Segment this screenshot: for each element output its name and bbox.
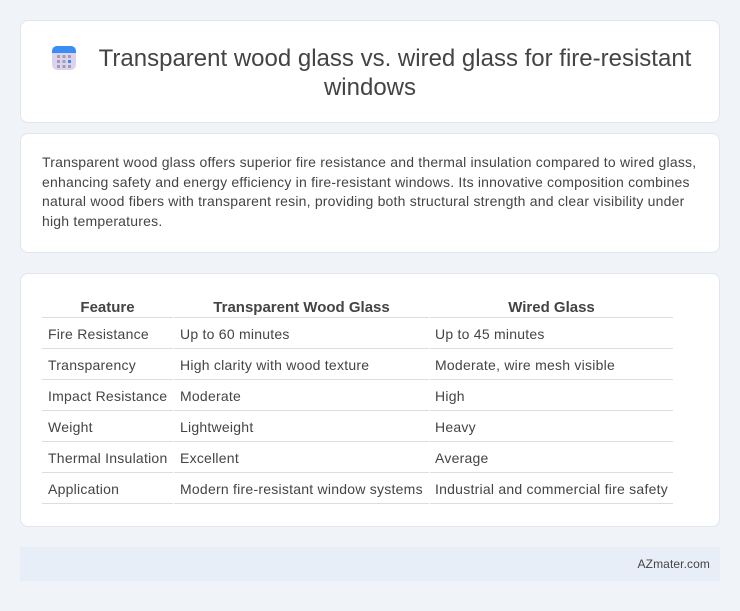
summary text: natural wood fibers with transparent resin, providing both structural strength and clear visibility under: [42, 193, 685, 209]
comparison table content: Transparency: [48, 357, 136, 373]
footer bar: [20, 547, 720, 581]
footer credit: AZmater.com: [638, 557, 710, 571]
panel: summary: [20, 133, 720, 253]
comparison table content: Up to 60 minutes: [180, 326, 290, 342]
comparison table content: High: [435, 388, 465, 404]
comparison table content: Industrial and commercial fire safety: [435, 481, 668, 497]
comparison table content: Excellent: [180, 450, 239, 466]
comparison table content: Wired Glass: [508, 299, 595, 316]
comparison table content: Heavy: [435, 419, 476, 435]
comparison table content: Moderate: [180, 388, 241, 404]
summary text: high temperatures.: [42, 213, 162, 229]
comparison table content: Impact Resistance: [48, 388, 167, 404]
comparison table content: Up to 45 minutes: [435, 326, 545, 342]
comparison table content: Thermal Insulation: [48, 450, 168, 466]
icon: calendar: [52, 46, 76, 70]
comparison table content: Fire Resistance: [48, 326, 149, 342]
comparison table content: Lightweight: [180, 419, 253, 435]
comparison table content: [42, 299, 673, 504]
comparison table content: Feature: [80, 299, 135, 316]
comparison table content: Weight: [48, 419, 93, 435]
title: [99, 45, 692, 101]
summary text: Transparent wood glass offers superior fire resistance and thermal insulation compared to wired glass,: [42, 154, 696, 170]
comparison table content: Application: [48, 481, 119, 497]
title: Transparent wood glass vs. wired glass for fire-resistant: [99, 45, 691, 72]
summary text: enhancing safety and energy efficiency in fire-resistant windows. Its innovative composition combines: [42, 174, 690, 190]
summary text: [42, 154, 696, 229]
panel: title card: [20, 20, 720, 123]
comparison table content: Moderate, wire mesh visible: [435, 357, 615, 373]
panel: comparison table: [20, 273, 720, 527]
title: windows: [324, 74, 416, 101]
comparison table content: Average: [435, 450, 489, 466]
comparison table content: Modern fire-resistant window systems: [180, 481, 423, 497]
comparison table content: Transparent Wood Glass: [213, 299, 390, 316]
comparison table content: High clarity with wood texture: [180, 357, 369, 373]
